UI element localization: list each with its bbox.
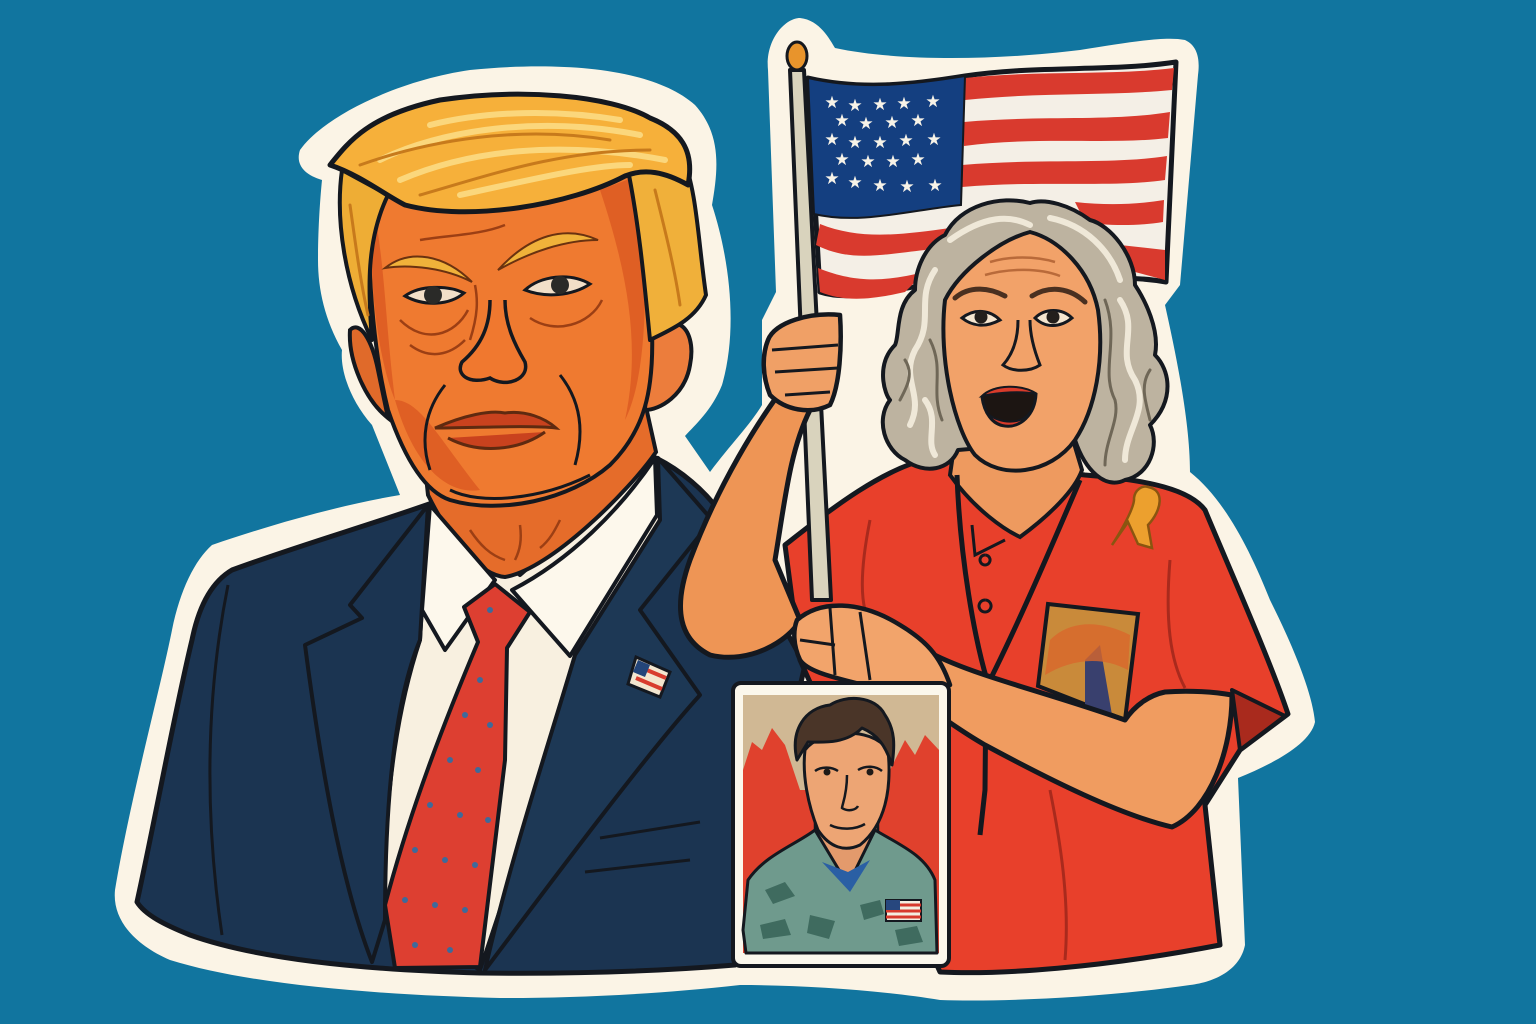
shirt placket (972, 525, 1005, 612)
flag stars: ★ (872, 133, 888, 153)
photo backdrop (743, 695, 939, 953)
soldier features (815, 767, 882, 829)
left ear (350, 327, 388, 418)
forehead lines (985, 258, 1060, 276)
white shirt (383, 458, 660, 970)
left collar (422, 505, 495, 650)
lanyard (957, 475, 1080, 680)
american flag (808, 62, 1176, 299)
eye right (525, 276, 590, 295)
flag stars: ★ (884, 113, 900, 133)
flag stars (824, 92, 943, 197)
flag stars: ★ (925, 92, 941, 112)
flag stars: ★ (896, 94, 912, 114)
flag stars: ★ (885, 152, 901, 172)
eyebrows (385, 233, 598, 282)
photo card (733, 683, 949, 966)
flag stars: ★ (824, 169, 840, 189)
lanyard cord (980, 680, 986, 835)
flag lapel pin (628, 657, 670, 697)
flag canton (808, 76, 965, 218)
flag pole (787, 42, 831, 600)
eyebrows (955, 289, 1085, 302)
upper hand (764, 314, 841, 410)
red shirt (785, 458, 1288, 973)
flag stars: ★ (910, 150, 926, 170)
hair curl shadows (900, 300, 1150, 465)
eyes (962, 310, 1072, 326)
person left: man in suit (137, 94, 805, 973)
flag stars: ★ (899, 177, 915, 197)
eye left (405, 286, 464, 304)
hair highlights (380, 113, 665, 195)
gold ribbon (1112, 487, 1160, 548)
flag stars: ★ (898, 131, 914, 151)
face wrinkles (400, 225, 602, 354)
camo spots (760, 882, 923, 946)
right ear (645, 323, 691, 410)
right lapel (485, 458, 712, 970)
fingers upper (772, 345, 838, 395)
mouth (435, 412, 556, 448)
flag stars: ★ (926, 130, 942, 150)
soldier neck (815, 790, 878, 880)
hair dark strands (350, 134, 680, 315)
right collar (512, 458, 657, 656)
jacket seams (210, 585, 700, 935)
lower arm (875, 650, 1232, 827)
neck (420, 380, 656, 577)
jowl lines (425, 375, 590, 498)
face (369, 165, 652, 506)
neck creases (470, 520, 560, 560)
hair curl highlights (910, 218, 1140, 460)
uniform flag patch (886, 900, 921, 921)
sleeve shadow (1232, 690, 1285, 750)
curly grey hair (883, 200, 1168, 483)
sticker die-cut border (115, 18, 1315, 1000)
flag stars: ★ (824, 130, 840, 150)
lips (982, 387, 1037, 426)
person right: woman with flag (680, 42, 1288, 973)
flag stars: ★ (847, 173, 863, 193)
side hair left (340, 170, 388, 340)
open mouth (982, 388, 1036, 426)
flag stars: ★ (872, 176, 888, 196)
soldier face (804, 733, 889, 848)
camo uniform (743, 830, 937, 953)
flag stars: ★ (860, 152, 876, 172)
lower hand (794, 606, 950, 690)
soldier hair (795, 698, 894, 765)
raised arm (680, 395, 810, 657)
flag stars: ★ (834, 150, 850, 170)
shirt folds (862, 520, 1185, 960)
flag stars: ★ (834, 111, 850, 131)
flag stars: ★ (847, 96, 863, 116)
fingers lower (800, 608, 870, 680)
suit jacket (137, 458, 805, 973)
face shading (371, 175, 645, 491)
face (943, 232, 1100, 471)
pocket photo (1038, 604, 1138, 720)
flag stars: ★ (910, 111, 926, 131)
left lapel (305, 505, 428, 962)
photo red wash (743, 728, 939, 953)
hair (330, 94, 690, 212)
flag stars: ★ (824, 93, 840, 113)
red tie (385, 584, 530, 968)
nose (460, 300, 526, 382)
neck (950, 430, 1082, 537)
side hair right (628, 155, 706, 340)
flag stars: ★ (858, 114, 874, 134)
blue undershirt (822, 860, 870, 892)
nose (1003, 320, 1040, 370)
flag stars: ★ (927, 176, 943, 196)
flag stars: ★ (847, 133, 863, 153)
flag stars: ★ (872, 95, 888, 115)
flag stripes (816, 68, 1174, 299)
